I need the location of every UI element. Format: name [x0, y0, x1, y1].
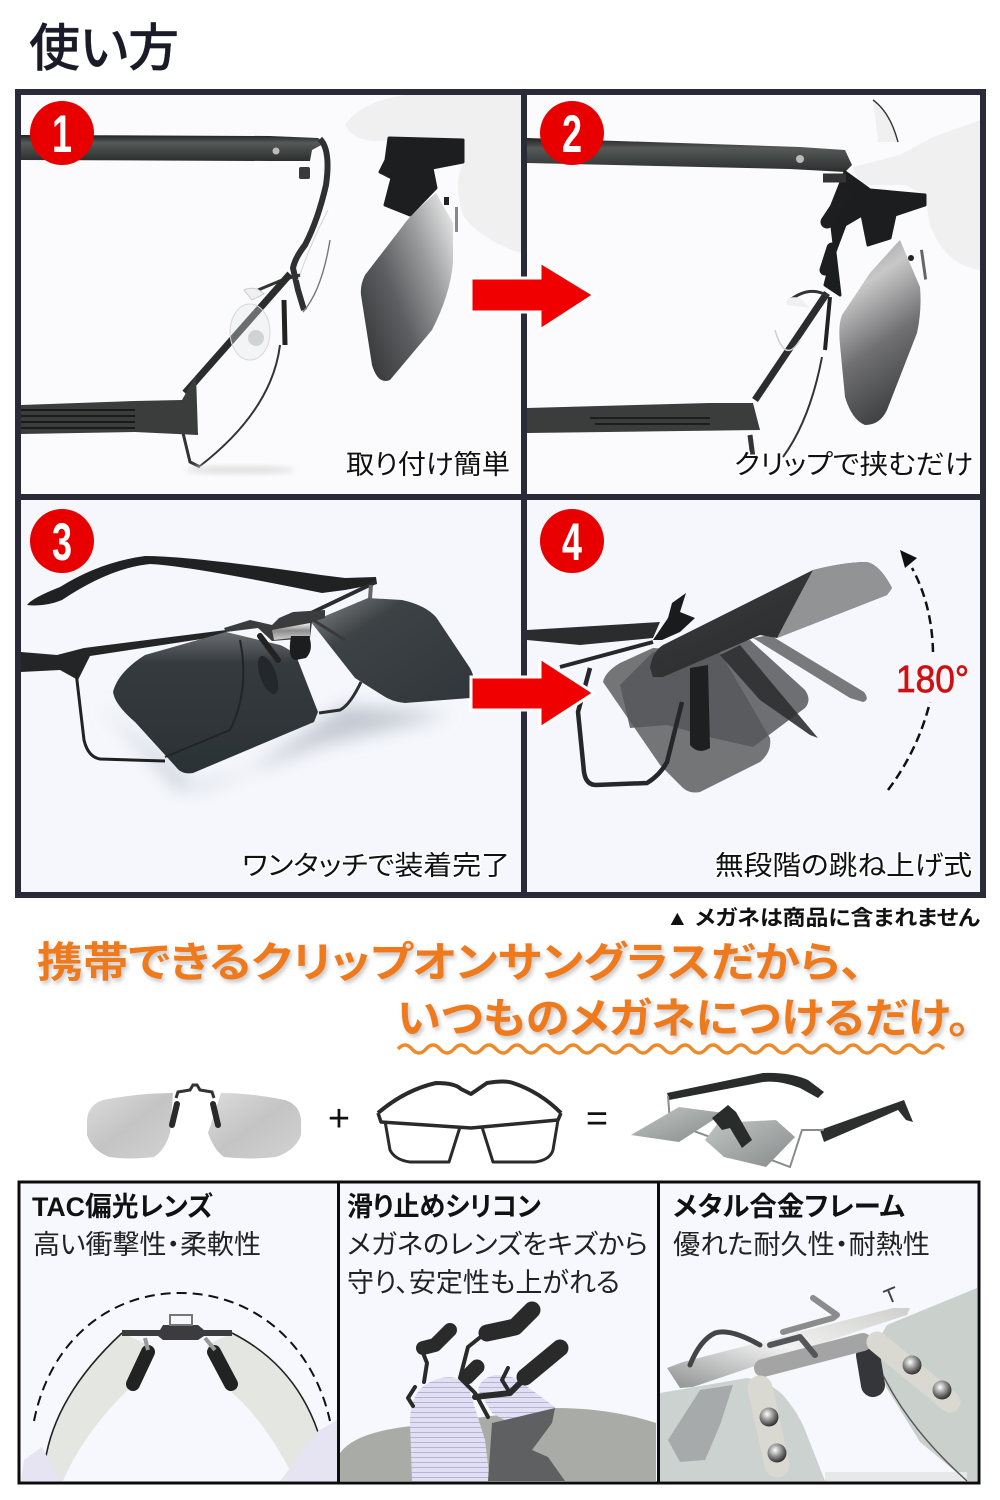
feature table [19, 1182, 979, 1483]
product: glasses with clip-on [631, 1073, 913, 1167]
caption: step 1: 取り付け簡単 [346, 450, 510, 480]
badge: 1 [30, 101, 94, 165]
plus sign: + [328, 1098, 350, 1140]
arrow: step 1 to 2 [471, 262, 594, 330]
finger: right [478, 1375, 555, 1430]
product: clip-on lenses [87, 1085, 301, 1158]
lens edge [883, 1375, 967, 1481]
rivet plate left [760, 1388, 777, 1465]
clip mechanism: step 1 [380, 138, 463, 215]
caption: step 3: ワンタッチで装着完了 [242, 851, 510, 881]
shadow: step 3 [100, 705, 450, 790]
badge: 4: 4 [562, 512, 582, 572]
panel: step 1 [21, 95, 521, 494]
silicone pads and wires [408, 1310, 560, 1417]
right lens [207, 1333, 318, 1480]
badge: 1: 1 [52, 104, 72, 164]
near lens: step 3 [113, 632, 318, 773]
finger seen through lens [488, 1408, 565, 1481]
glasses: step 2 frame [527, 138, 852, 458]
badge: 2: 2 [562, 104, 582, 164]
left lens [40, 1333, 148, 1481]
badge: 3: 3 [52, 512, 72, 572]
label: 180°: 180° [896, 659, 969, 701]
stop tab [883, 1287, 895, 1302]
dashed curvature arc [34, 1293, 330, 1421]
panel divider B [657, 1182, 660, 1483]
product: glasses [378, 1082, 561, 1162]
badge: 4 [540, 509, 604, 573]
silicone pad [868, 1355, 873, 1385]
wavy underline [398, 1045, 944, 1053]
lens tip behind glove: step 2 [873, 100, 898, 142]
note: ▲ メガネは商品に含まれません [666, 907, 981, 930]
table reflection [825, 1472, 967, 1481]
panel: step 2 [527, 95, 980, 494]
how-to frame [15, 89, 986, 898]
headline line 2: いつものメガネにつけるだけ。 [397, 995, 970, 1042]
gloves [21, 1420, 337, 1481]
clip mechanism: step 4 [653, 593, 695, 640]
panel: step 3 [21, 500, 521, 892]
pad shadow on lens [668, 1385, 733, 1462]
badge: 2 [540, 101, 604, 165]
title: 使い方 [29, 20, 179, 77]
glasses: step 1 frame [21, 135, 330, 474]
lens edge reflection: step 3 [165, 640, 243, 757]
caption: step 2: クリップで挟むだけ [734, 450, 973, 480]
clip bridge [122, 1315, 232, 1384]
body: TAC lens: 高い衝撃性・柔軟性 [33, 1230, 261, 1260]
body: metal: 優れた耐久性・耐熱性 [673, 1230, 930, 1260]
arrow: step 3 to 4 [471, 658, 594, 728]
heading: metal: メタル合金フレーム [673, 1192, 905, 1222]
headline line 1: 携帯できるクリップオンサングラスだから、 [37, 939, 863, 986]
caption: step 4: 無段階の跳ね上げ式 [715, 851, 972, 881]
rivets [760, 1356, 952, 1462]
panel divider A [337, 1182, 340, 1483]
lens positions: step 4 [603, 635, 867, 792]
lens edges [45, 1333, 318, 1462]
clip-on lens: step 2 [839, 240, 921, 425]
finger: left [410, 1377, 490, 1481]
heading: silicone: 滑り止めシリコン [347, 1192, 541, 1222]
heading: TAC lens: TAC偏光レンズ [32, 1191, 213, 1222]
clip mechanism and nose pads: step 2 [823, 172, 927, 295]
panel: silicone pads [340, 1310, 656, 1481]
left lens [660, 1378, 825, 1481]
panel: step 4 [527, 500, 980, 892]
nose pad seen through lens: step 3 [254, 653, 282, 697]
glove: step 1 [345, 95, 521, 253]
lens [340, 1408, 656, 1481]
wires [690, 1298, 863, 1368]
panel: TAC lens [21, 1293, 337, 1481]
far lens: step 3 [311, 598, 474, 703]
body: silicone line 1: メガネのレンズをキズから [347, 1230, 648, 1260]
panel: metal frame [660, 1287, 977, 1481]
frame rim: step 4 [560, 642, 710, 785]
glasses: step 3 frame [21, 556, 377, 761]
arrow: 180° rotation [888, 550, 933, 790]
lens tip edge: step 2 [873, 100, 898, 142]
rivet plate right [877, 1342, 950, 1402]
right lens [877, 1288, 977, 1481]
equals sign: = [586, 1098, 608, 1140]
flipped-up lens: step 4 [650, 562, 892, 677]
badge: 3 [30, 509, 94, 573]
clip-on lens: step 1 [361, 193, 453, 381]
temple: step 4 [527, 622, 660, 645]
metal plate [667, 1308, 910, 1388]
clip mechanism: step 3 [224, 610, 345, 660]
glove: step 2 [853, 120, 980, 270]
body: silicone line 2: 守り、安定性も上がれる [347, 1268, 620, 1298]
